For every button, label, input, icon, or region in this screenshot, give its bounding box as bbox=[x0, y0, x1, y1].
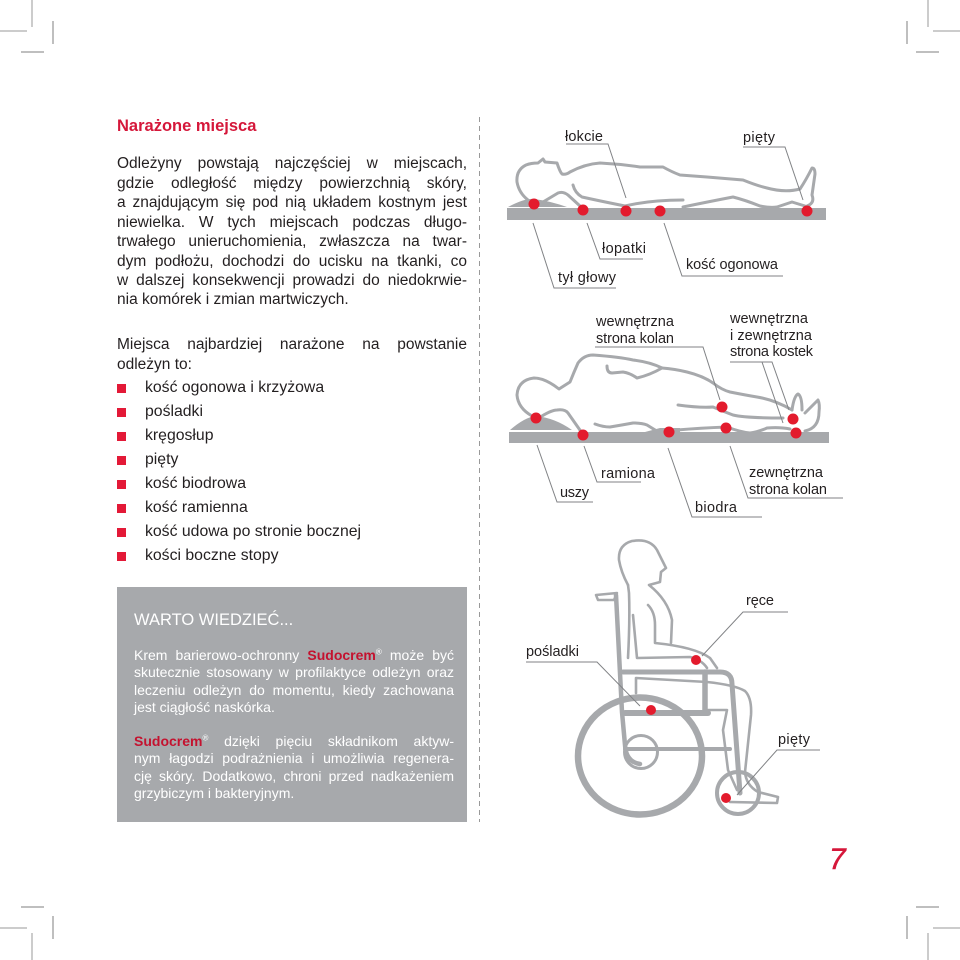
pressure points bbox=[528, 198, 812, 216]
labels: łokcie bbox=[565, 129, 603, 145]
text block: intro paragraph: trwałego unieruchomienia, zwłaszcza na twar- bbox=[117, 233, 467, 250]
body outline bbox=[517, 159, 815, 207]
diagram: lying on side: zewnętrzna bbox=[749, 465, 824, 481]
diagram: lying on side: strona kolan bbox=[596, 331, 674, 347]
labels: wewnętrzna bbox=[595, 314, 675, 330]
leader lines bbox=[533, 144, 803, 288]
diagram: lying on side: biodra bbox=[695, 500, 738, 516]
diagram: wheelchair: pięty bbox=[778, 732, 811, 748]
callout text: Warto wiedzieć: grzybiczym i bakteryjnym. bbox=[134, 785, 294, 801]
diagram: lying on side: strona kostek bbox=[730, 344, 814, 360]
diagram: lying on back: tył głowy bbox=[558, 270, 617, 286]
callout text: Warto wiedzieć: WARTO WIEDZIEĆ... bbox=[134, 611, 293, 629]
text block: intro paragraph: Odleżyny powstają najczęściej w miejscach, bbox=[117, 155, 467, 172]
leader lines bbox=[537, 347, 843, 517]
list: exposed places: kość ogonowa i krzyżowa bbox=[145, 379, 324, 396]
list: exposed places: kręgosłup bbox=[145, 427, 214, 444]
callout text: Warto wiedzieć: nym łagodzi podrażnienia i umożliwia regenera- bbox=[134, 750, 454, 766]
diagram: lying on side: uszy bbox=[560, 485, 590, 501]
callout text: Warto wiedzieć: leczeniu odleżyn do momentu, kiedy zachowana bbox=[134, 682, 454, 698]
text block: list intro: Miejsca najbardziej narażone na powstanie bbox=[117, 336, 467, 353]
callout text: Warto wiedzieć: cję skóry. Dodatkowo, chroni przed nadkażeniem bbox=[134, 768, 454, 784]
diagram: lying on back: łopatki bbox=[602, 241, 646, 257]
labels: ręce bbox=[746, 593, 774, 609]
wheelchair frame bbox=[578, 593, 759, 814]
diagram: lying on side: wewnętrzna bbox=[729, 311, 809, 327]
pressure points bbox=[646, 655, 731, 803]
list: exposed places: kości boczne stopy bbox=[145, 547, 278, 564]
callout text: Warto wiedzieć: skutecznie stosowany w profilaktyce odleżyn oraz bbox=[134, 664, 454, 680]
panel: Warto wiedzieć bbox=[117, 587, 467, 822]
text block: intro paragraph: a znajdującym się pod nią układem kostnym jest bbox=[117, 194, 467, 211]
callout text: Warto wiedzieć bbox=[134, 610, 454, 801]
pressure points bbox=[530, 402, 802, 440]
mattress and pillow bbox=[507, 199, 826, 220]
text block: intro paragraph: gdzie odległość między powierzchnią skóry, bbox=[117, 175, 467, 192]
list: exposed places: kość biodrowa bbox=[145, 475, 246, 492]
diagram: lying on back: kość ogonowa bbox=[686, 257, 779, 273]
page number: 7 bbox=[829, 843, 846, 876]
text block: list intro bbox=[117, 336, 467, 373]
person outline bbox=[619, 540, 778, 803]
callout text: Warto wiedzieć: Krem barierowo-ochronny Sudocrem® może być bbox=[134, 647, 454, 663]
heading: Narażone miejsca: Narażone miejsca bbox=[117, 117, 256, 135]
diagram: lying on side: i zewnętrzna bbox=[730, 328, 813, 344]
list: exposed places: kość udowa po stronie bocznej bbox=[145, 523, 361, 540]
list: exposed places: kość ramienna bbox=[145, 499, 248, 516]
list: exposed places bbox=[117, 379, 361, 564]
text block: intro paragraph bbox=[117, 155, 467, 308]
leader lines bbox=[526, 612, 820, 795]
text block: intro paragraph: niewielka. W tych miejscach podczas długo- bbox=[117, 214, 467, 231]
text block: intro paragraph: w dalszej konsekwencji prowadzi do niedokrwie- bbox=[117, 272, 467, 289]
diagram: lying on side: ramiona bbox=[601, 466, 656, 482]
body outline bbox=[517, 355, 819, 433]
list: exposed places: pięty bbox=[145, 451, 178, 468]
text block: intro paragraph: nia komórek i zmian martwiczych. bbox=[117, 291, 349, 308]
callout text: Warto wiedzieć: Sudocrem® dzięki pięciu składnikom aktyw- bbox=[134, 733, 454, 749]
text block: intro paragraph: dym podłożu, dochodzi do ucisku na tkanki, co bbox=[117, 253, 467, 270]
text block: list intro: odleżyn to: bbox=[117, 356, 192, 373]
diagram: lying on back: pięty bbox=[743, 130, 776, 146]
list: exposed places: pośladki bbox=[145, 403, 203, 420]
diagram: wheelchair: pośladki bbox=[526, 644, 579, 660]
diagram: lying on side: strona kolan bbox=[749, 482, 827, 498]
mattress and pillow bbox=[509, 416, 829, 443]
callout text: Warto wiedzieć: jest ciągłość naskórka. bbox=[134, 699, 275, 715]
